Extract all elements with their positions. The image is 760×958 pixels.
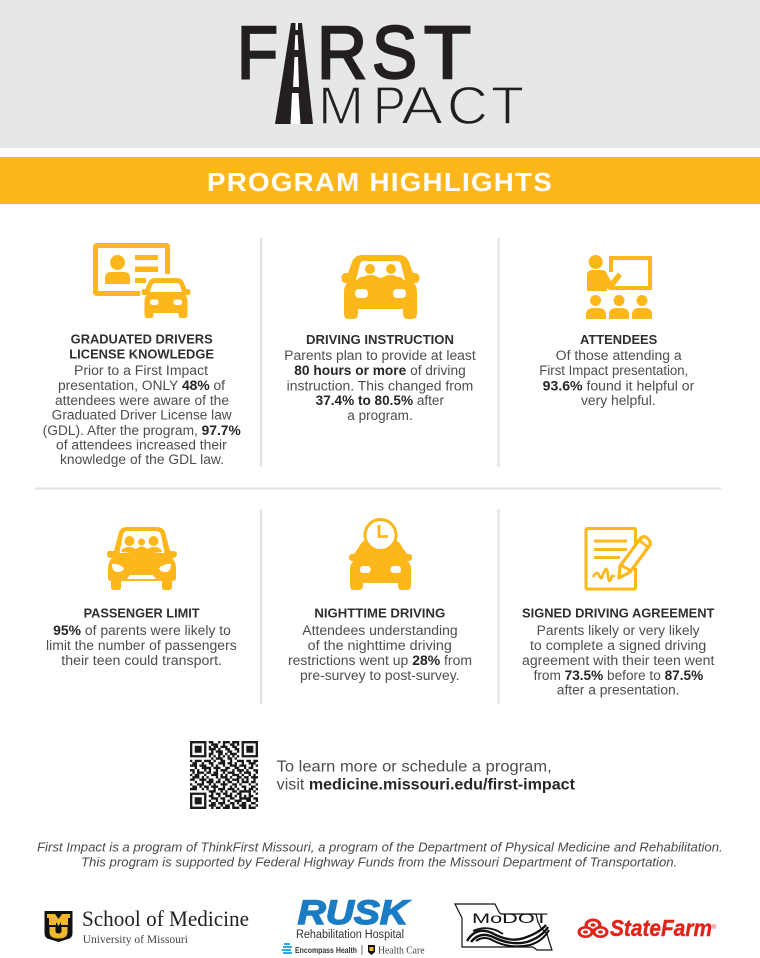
logo: First Impact [237, 11, 524, 136]
icon: car with two people [342, 255, 420, 319]
program statement: First Impact is a program of ThinkFirst Missouri, a program of the Department of Physical Medicine and Rehabilitation. [37, 841, 723, 855]
body text: a program. [347, 408, 413, 423]
body text: Attendees understanding [302, 623, 458, 638]
logo: MoDOT: MoDOT [472, 910, 549, 926]
heading: SIGNED DRIVING AGREEMENT [522, 607, 715, 621]
body text: 80 hours or more of driving [294, 363, 466, 378]
body text: First Impact presentation, [539, 363, 688, 378]
body text: attendees were aware of the [55, 393, 229, 408]
body text: Parents likely or very likely [537, 623, 700, 638]
logo: First Impact: T [424, 11, 471, 94]
icon: license card and car [96, 246, 193, 322]
body text: agreement with their teen went [522, 653, 715, 668]
body text [284, 348, 476, 423]
body text: instruction. This changed from [287, 378, 473, 394]
body text: restrictions went up 28% from [288, 653, 472, 668]
logo: Rusk Rehabilitation Hospital [282, 894, 425, 956]
heading [69, 332, 214, 362]
logo: First Impact: T [491, 76, 524, 136]
call to action text [277, 758, 575, 794]
logo: First Impact: M [318, 76, 364, 136]
panel: passenger limit [46, 527, 237, 668]
icon: car with clock [349, 520, 412, 590]
body text: Of those attending a [556, 348, 682, 363]
body text: after a presentation. [557, 682, 680, 698]
logo: First Impact: A [401, 76, 443, 136]
logo: State Farm: ® [712, 924, 717, 931]
body text [288, 623, 472, 683]
body text: of the nighttime driving [308, 638, 452, 653]
body text [522, 623, 715, 698]
heading: DRIVING INSTRUCTION [306, 333, 454, 347]
body text [539, 348, 695, 408]
body text: pre-survey to post-survey. [300, 668, 460, 683]
panel: driving instruction [284, 255, 476, 423]
body text: very helpful. [581, 393, 656, 408]
body text [46, 623, 237, 668]
body text: limit the number of passengers [46, 638, 237, 653]
body text: Parents plan to provide at least [284, 348, 476, 363]
heading: NIGHTTIME DRIVING [314, 607, 445, 621]
logo: First Impact: F [237, 11, 278, 94]
body text: Graduated Driver License law [52, 408, 232, 422]
program statement [37, 841, 723, 870]
logo: First Impact: R [317, 11, 367, 94]
body text: their teen could transport. [61, 653, 222, 668]
logo: Rusk Rehabilitation Hospital: Encompass Health [295, 945, 357, 955]
logo: State Farm: StateFarm [610, 915, 712, 941]
call to action text: visit medicine.missouri.edu/first-impact [277, 776, 575, 794]
logo: First Impact: C [447, 76, 488, 136]
body text: 93.6% found it helpful or [543, 378, 695, 394]
banner: program highlights [0, 157, 760, 204]
panel: signed driving agreement [522, 528, 715, 698]
body text: Prior to a First Impact [74, 363, 208, 378]
icon: car with three passengers [107, 527, 177, 590]
body text: 37.4% to 80.5% after [316, 393, 445, 408]
logo: Rusk Rehabilitation Hospital: RUSK [298, 894, 411, 932]
logo: University of Missouri School of Medicine: School of Medicine [82, 906, 249, 931]
body text: knowledge of the GDL law. [60, 452, 224, 467]
icon: document and pen [586, 528, 650, 589]
heading: GRADUATED DRIVERS [71, 332, 213, 346]
call to action text: To learn more or schedule a program, [277, 758, 552, 776]
panel: attendees [539, 255, 695, 408]
body text: of attendees increased their [56, 438, 227, 452]
logo: Rusk Rehabilitation Hospital: Rehabilitation Hospital [296, 929, 404, 941]
body text [43, 363, 241, 467]
program statement: This program is supported by Federal Highway Funds from the Missouri Department of Transportation. [81, 856, 677, 870]
body text: from 73.5% before to 87.5% [534, 668, 703, 683]
icon: presenter and audience [586, 255, 652, 319]
heading: PASSENGER LIMIT [84, 607, 200, 621]
logo: University of Missouri School of Medicine [44, 906, 249, 946]
logo: First Impact: S [372, 11, 417, 94]
body text: presentation, ONLY 48% of [58, 378, 225, 393]
body text: to complete a signed driving [530, 638, 706, 653]
panel: nighttime driving [288, 520, 472, 683]
logo: Rusk Rehabilitation Hospital: Health Care [378, 946, 425, 956]
body text: 95% of parents were likely to [53, 623, 231, 638]
body text: (GDL). After the program, 97.7% [43, 423, 241, 438]
logo: MoDOT [455, 904, 552, 950]
QR code [190, 741, 258, 809]
banner: program highlights: PROGRAM HIGHLIGHTS [207, 167, 553, 197]
panel: graduated drivers license knowledge [43, 246, 241, 467]
header background [0, 0, 760, 148]
heading: LICENSE KNOWLEDGE [69, 348, 214, 362]
logo: University of Missouri School of Medicine: University of Missouri [83, 932, 189, 946]
heading: ATTENDEES [580, 333, 657, 347]
logo: First Impact: P [373, 76, 406, 136]
